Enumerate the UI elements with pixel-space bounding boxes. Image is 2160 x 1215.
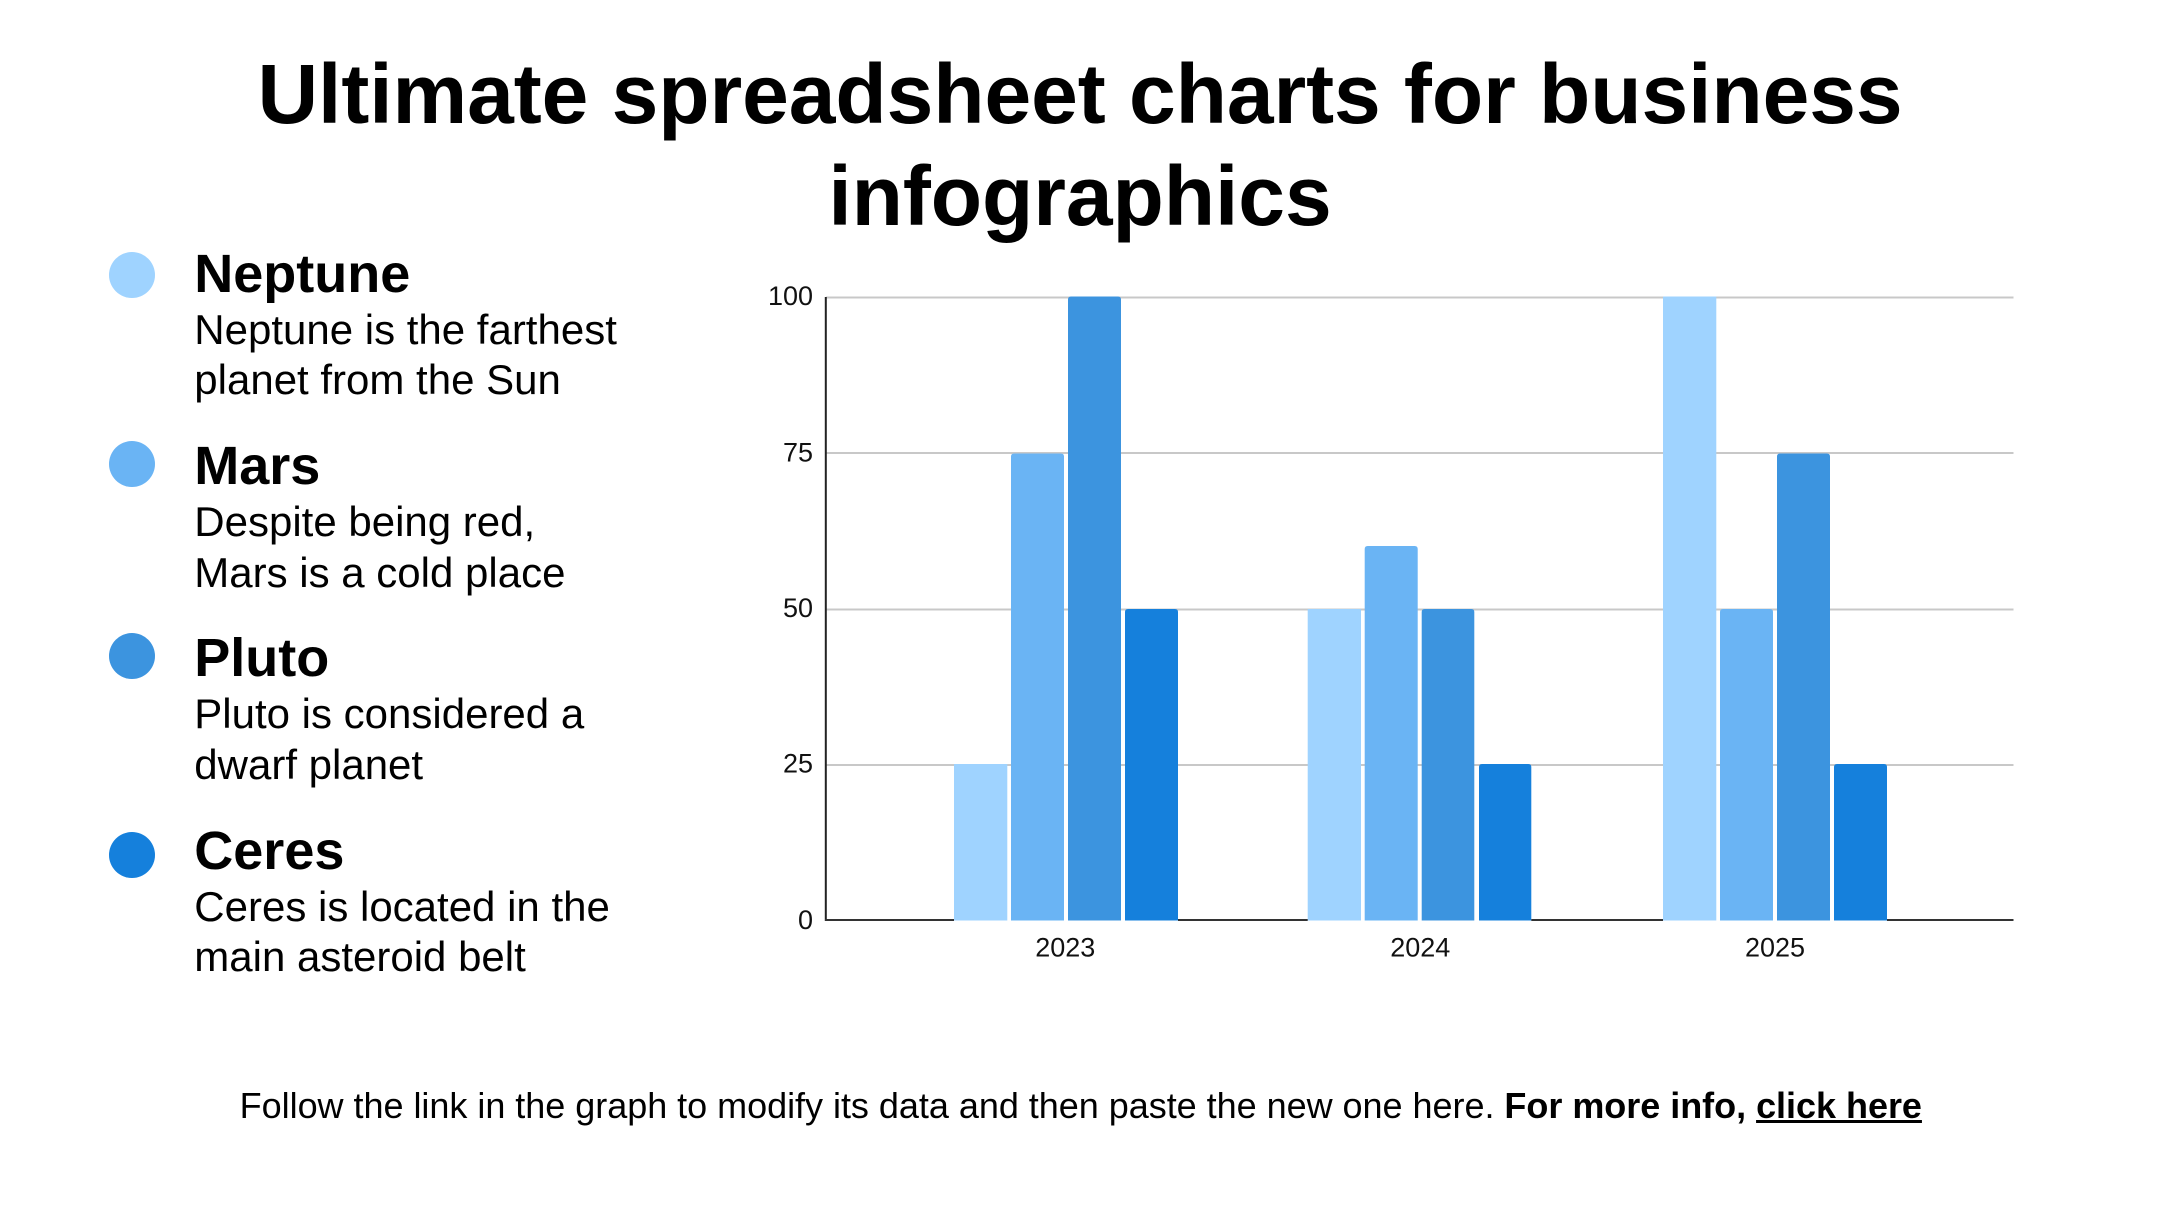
y axis labels: 50: [783, 593, 813, 623]
legend item: Ceres: [109, 821, 610, 980]
y axis labels: [768, 281, 813, 935]
icon: Mars colour dot: [109, 441, 155, 487]
x axis labels: [1035, 933, 1805, 963]
text: Mars description: Despite being red,: [194, 498, 535, 545]
title: Ultimate spreadsheet charts for business: [257, 47, 1903, 141]
y axis labels: 25: [783, 748, 813, 778]
y axis labels: 0: [798, 905, 813, 935]
x axis line: [825, 919, 2014, 921]
icon: Pluto colour dot: [109, 633, 155, 679]
text: Ceres description: [194, 883, 610, 980]
heading: Neptune: Neptune: [194, 244, 410, 304]
icon: Ceres colour dot: [109, 832, 155, 878]
legend item: Neptune: [109, 244, 617, 403]
chart gridlines: [826, 298, 2014, 765]
text: Mars description: [194, 498, 565, 596]
text: Neptune description: Neptune is the farthest: [194, 306, 617, 353]
x axis labels: 2024: [1390, 933, 1450, 963]
text: Neptune description: planet from the Sun: [194, 356, 561, 403]
y axis line: [825, 297, 827, 921]
bars: 2023: [954, 296, 1178, 920]
bars: 2024: [1308, 546, 1531, 920]
bar chart: [768, 281, 2014, 963]
legend item: Pluto: [109, 628, 584, 788]
bars: 2025: [1663, 296, 1887, 920]
icon: Neptune colour dot: [109, 252, 155, 298]
text: Pluto description: Pluto is considered a: [194, 690, 584, 737]
heading: Mars: Mars: [194, 436, 320, 496]
x axis labels: 2023: [1035, 933, 1095, 963]
x axis labels: 2025: [1745, 933, 1805, 963]
footer note: Follow the link in the graph to modify its data and then paste the new one here. For more info, click here: [240, 1085, 1922, 1126]
y axis labels: 100: [768, 281, 813, 311]
text: Neptune description: [194, 306, 617, 403]
heading: Ceres: Ceres: [194, 821, 344, 881]
text: Ceres description: main asteroid belt: [194, 933, 526, 980]
text: Mars description: Mars is a cold place: [194, 548, 565, 596]
heading: Pluto: Pluto: [194, 628, 329, 688]
title: [257, 47, 1903, 243]
text: Pluto description: dwarf planet: [194, 741, 423, 788]
y axis labels: 75: [783, 437, 813, 467]
legend item: Mars: [109, 436, 565, 596]
title: infographics: [828, 149, 1332, 243]
text: Ceres description: Ceres is located in the: [194, 883, 610, 930]
text: Pluto description: [194, 690, 584, 788]
